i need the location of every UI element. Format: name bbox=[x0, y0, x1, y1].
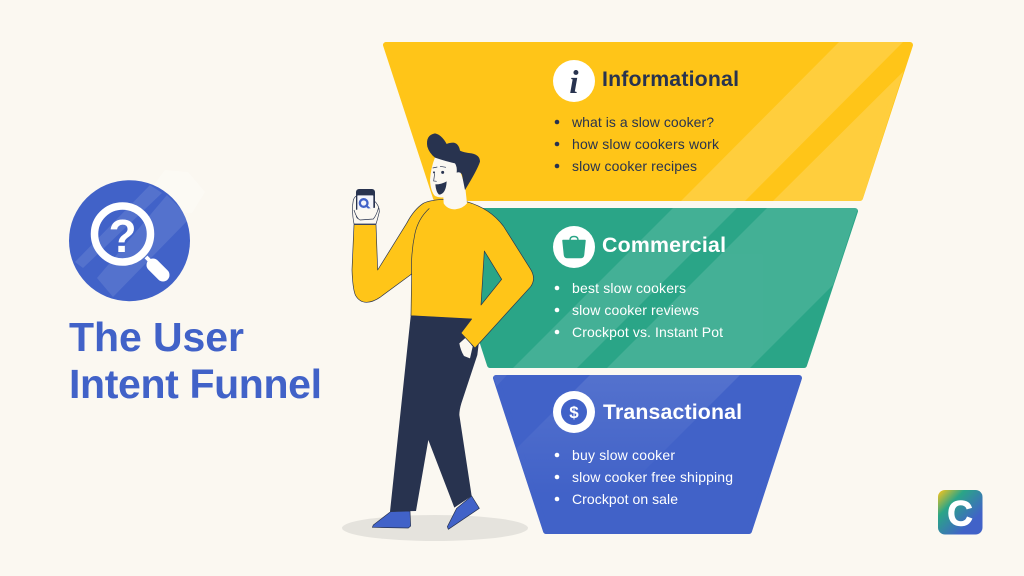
title: Intent Funnel bbox=[69, 361, 322, 407]
icon: magnifier with question mark bbox=[69, 180, 190, 302]
list: slow cooker recipes bbox=[572, 158, 697, 174]
icon: info: i bbox=[569, 65, 579, 101]
panel: transactional bbox=[470, 375, 799, 531]
heading: Informational bbox=[602, 67, 739, 91]
heading: Transactional bbox=[603, 400, 742, 424]
icon: shopping bag bbox=[553, 226, 595, 268]
trousers bbox=[390, 313, 480, 512]
pocket hand bbox=[459, 337, 473, 358]
list: best slow cookers bbox=[572, 280, 686, 296]
list: buy slow cooker bbox=[572, 447, 675, 463]
icon: magnifier with question mark: ? bbox=[108, 210, 137, 262]
list bbox=[555, 447, 733, 507]
icon: dollar coin: $ bbox=[569, 403, 579, 422]
list bbox=[555, 114, 720, 174]
heading: Commercial bbox=[602, 233, 726, 257]
list: slow cooker free shipping bbox=[572, 469, 733, 485]
ground shadow bbox=[342, 515, 528, 541]
title: The User bbox=[69, 314, 244, 360]
shoes bbox=[372, 496, 479, 529]
icon: dollar coin bbox=[553, 391, 595, 433]
icon: info bbox=[553, 60, 595, 102]
list: what is a slow cooker? bbox=[571, 114, 714, 130]
logo: C bbox=[947, 494, 973, 534]
list bbox=[555, 280, 723, 340]
head bbox=[427, 133, 480, 209]
phone and raised hand bbox=[352, 189, 379, 224]
list: Crockpot vs. Instant Pot bbox=[572, 324, 723, 340]
logo bbox=[938, 490, 982, 534]
panel: informational bbox=[386, 42, 960, 201]
list: Crockpot on sale bbox=[572, 491, 678, 507]
title bbox=[69, 314, 322, 407]
list: how slow cookers work bbox=[572, 136, 720, 152]
person illustration bbox=[352, 133, 534, 529]
list: slow cooker reviews bbox=[572, 302, 699, 318]
sweater bbox=[352, 199, 534, 348]
panel: commercial bbox=[480, 208, 858, 368]
